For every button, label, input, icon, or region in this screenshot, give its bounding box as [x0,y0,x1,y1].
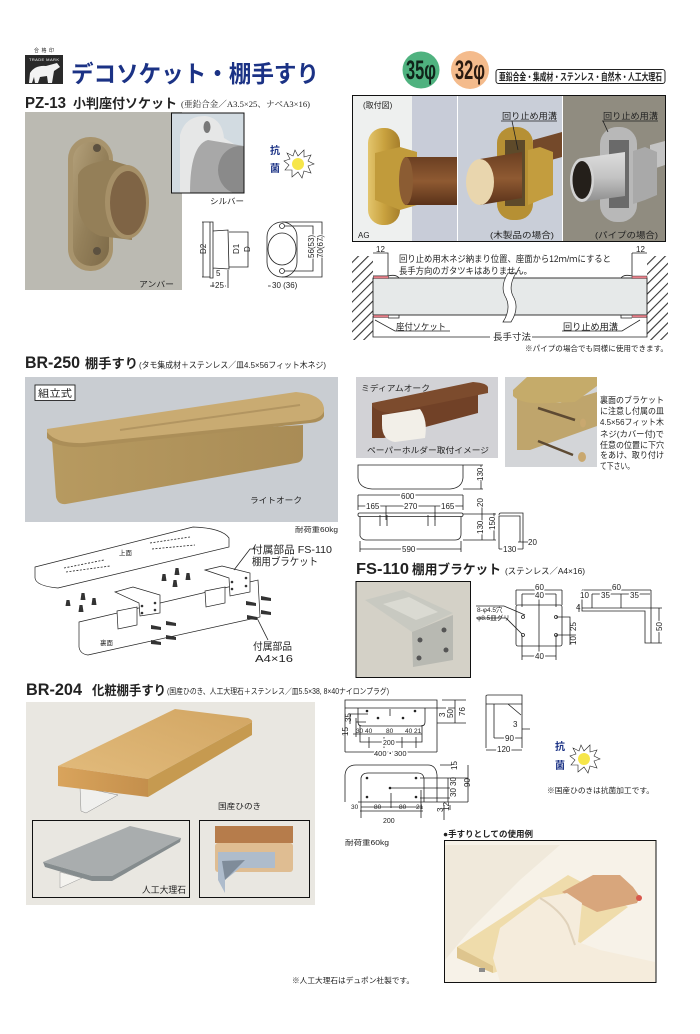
diagram: BR-250 front dimension: 130 [476,520,485,534]
diagram: PZ-13 front view: 56(53) [307,235,316,258]
photo: handrail usage [444,840,656,982]
diagram: BR-250 front dimension: 600 [401,492,415,501]
callout: FS-110 bracket parts [252,543,332,568]
diagram: BR-250 front dimension: 590 [402,545,416,554]
heading: FS-110 [356,561,585,578]
callout: FS-110 bracket parts: 棚用ブラケット [252,555,318,568]
heading: BR-250: BR-250 [25,354,80,372]
diagram: mounting cross section: ※パイプの場合でも同様に使用できます。 [525,343,668,353]
diagram: BR-204 front dimension [341,700,467,758]
diagram: BR-204 underside dimension: 80 [374,804,382,811]
back board: 裏面 [100,638,114,647]
badge: 32 phi: 32φ [455,55,485,85]
diagram: BR-204 front dimension: 35 [344,713,353,722]
diagram: FS-110 front dimension: 40 [535,652,544,661]
diagram: FS-110 front dimension [476,583,578,661]
photo: BR-250 shelf: ライトオーク [250,496,302,505]
diagram: PZ-13 side view [199,222,252,290]
diagram: BR-204 front dimension: 30 40 [356,728,373,735]
diagram: BR-204 side dimension: 90 [505,734,514,743]
photo: BR-250 shelf: 組立式 [38,387,72,400]
diagram: mounting cross section: 長手方向のガタツキはありません。 [399,265,532,276]
diagram: BR-250 side dimension: 130 [503,545,517,554]
text: bracket note: ネジ(カバー付)で [600,429,664,439]
photo: PZ-13 silver socket: シルバー [210,197,244,206]
photo: medium oak paper holder: ミディアムオーク [361,383,430,393]
diagram: BR-204 underside dimension: 21 [416,804,424,811]
top board [35,527,229,588]
panel: wood mounted AG: AG [358,231,370,240]
panel: wood case: 回り止め用溝 [502,111,558,121]
callout: A4x16 screws [253,640,294,665]
diagram: BR-250 exploded assembly [35,527,271,655]
diagram: PZ-13 side view: D [243,246,252,252]
heading: FS-110: (ステンレス／A4×16) [505,566,585,576]
diagram: PZ-13 front view: 30 (36) [272,281,298,290]
photo: medium oak paper holder: ペーパーホルダー取付イメージ [367,445,489,455]
heading: BR-204: (国産ひのき、人工大理石＋ステンレス／皿5.5×38, 8×40ナイロンプラグ) [167,686,389,696]
text: antibacterial note: ※国産ひのきは抗菌加工です。 [547,785,654,795]
diagram: mounting cross section: 座付ソケット [396,322,446,332]
diagram: BR-204 front dimension: 400・300 [374,749,407,758]
material label [496,70,665,84]
text: bracket note: て下さい。 [600,461,634,471]
diagram: BR-204 front dimension: 80 [386,728,394,735]
badge: 35 phi [402,52,440,88]
diagram: BR-204 front dimension: 15 [341,727,350,736]
diagram: BR-250 front dimension: 270 [404,502,418,511]
panel: wood case [458,96,562,241]
diagram: BR-204 underside dimension: 90 [463,778,472,787]
diagram: mounting cross section [352,245,668,353]
diagram: FS-110 side dimension: 35 [601,591,610,600]
heading: BR-250: 棚手すり [85,356,138,371]
diagram: BR-204 front dimension: 200 [383,740,395,747]
icon: trade mark bear logo [25,47,63,84]
text: marble footnote: ※人工大理石はデュポン社製です。 [292,975,414,985]
diagram: BR-250 front dimension: 165 [441,502,455,511]
text: BR-250 load: 耐荷重60kg [295,525,338,534]
diagram: FS-110 front dimension: 40 [535,591,544,600]
diagram: BR-250 front dimension [358,492,497,554]
heading: usage example: ●手すりとしての使用例 [443,829,533,839]
brackets [115,566,250,629]
diagram: BR-250 front dimension: 20 [476,498,485,507]
photo: PZ-13 silver socket [171,112,244,204]
diagram: mounting cross section: 回り止め用木ネジ納まり位置、座面から12ｍ/ｍにすると [399,253,611,264]
icon: antibacterial mark 2: 菌 [555,760,565,772]
diagram: BR-204 underside dimension: 3 [436,807,445,812]
diagram: FS-110 front dimension: 10 [569,636,578,645]
diagram: PZ-13 front view: 70(67) [316,235,325,258]
photo panel: BR-204 [26,702,315,905]
diagram: BR-204 underside dimension: 30 [351,804,359,811]
back board [79,580,260,655]
diagram: BR-250 top dimension: 130 [476,467,485,481]
diagram: PZ-13 side view: 25 [215,281,224,290]
diagram: FS-110 side dimension: 10 [580,591,589,600]
heading: BR-250 [25,354,326,372]
diagram: FS-110 front dimension: 60 [535,583,544,592]
diagram: BR-204 side dimension [486,695,530,754]
diagram: FS-110 side dimension: 60 [612,583,621,592]
diagram: BR-204 side dimension: 3 [513,720,518,729]
inset: artificial marble: 人工大理石 [142,884,186,895]
photo: hinoki shelf: 国産ひのき [218,801,261,811]
inset: artificial marble [32,820,190,898]
panel: wood mounted AG: (取付図) [363,100,393,110]
icon: trade mark bear logo: 合 格 印 [34,47,54,54]
diagram: BR-204 underside dimension: 12 [442,802,451,811]
heading: PZ-13: 小判座付ソケット [73,96,177,111]
heading: BR-250: (タモ集成材＋ステンレス／皿4.5×56フィット木ネジ) [139,360,326,370]
callout: A4x16 screws: 付属部品 [253,640,292,653]
photo: PZ-13 amber socket [25,112,182,290]
panel: wood mounted AG [353,96,457,241]
callout: FS-110 bracket parts: 付属部品 FS-110 [252,543,332,556]
text: BR-204 load: 耐荷重60kg [345,838,389,847]
icon: antibacterial mark 1 [270,144,314,178]
diagram: FS-110 front dimension: 8-φ4.5穴 [477,606,503,614]
heading: PZ-13 [25,95,310,112]
icon: antibacterial mark 1: 抗 [270,144,280,157]
diagram: BR-250 side dimension [499,513,537,554]
badge: 32 phi [451,51,489,89]
photo: BR-250 shelf [25,377,338,522]
icon: antibacterial mark 2 [555,740,600,773]
screws [66,568,271,645]
photo: PZ-13 amber socket: アンバー [139,280,174,289]
heading: FS-110: FS-110 [356,561,409,578]
panel: wood case: (木製品の場合) [490,230,554,240]
diagram: BR-204 side dimension: 120 [497,745,511,754]
photo: medium oak paper holder [356,377,498,458]
diagram: PZ-13 side view: 5 [216,269,221,278]
diagram: BR-204 underside dimension: 200 [383,818,395,825]
heading: FS-110: 棚用ブラケット [412,562,501,577]
diagram: BR-204 underside dimension: 80 [399,804,407,811]
heading: PZ-13: (亜鉛合金／A3.5×25、ナベA3×16) [181,99,310,109]
diagram: BR-204 underside dimension: 30 [449,788,458,797]
diagram: BR-204 front dimension: 76 [458,707,467,716]
heading: BR-204: BR-204 [26,681,83,699]
heading: BR-204: 化粧棚手すり [92,683,166,698]
diagram: FS-110 side dimension: 4 [576,603,581,612]
top board: 上面 [119,548,132,557]
text: bracket note: 4.5×56フィット木 [600,417,664,427]
icon: antibacterial mark 2: 抗 [555,740,565,753]
callout: A4x16 screws: A4×16 [255,654,294,665]
diagram: FS-110 front dimension: 25 [569,622,578,631]
diagram: PZ-13 front view [267,222,325,290]
badge: 35 phi: 35φ [406,55,436,85]
diagram: PZ-13 side view: D1 [232,243,241,254]
heading: PZ-13: PZ-13 [25,95,66,112]
diagram: BR-204 underside dimension [345,761,472,825]
text: bracket note: 任意の位置に下穴 [600,440,664,450]
diagram: mounting cross section: 回り止め用溝 [563,321,618,332]
diagram: PZ-13 side view: D2 [199,243,208,254]
photo panel: mounting views [352,96,666,242]
photo: hinoki shelf [58,709,261,813]
diagram: BR-250 side dimension: 20 [528,538,537,547]
text: bracket note: に注意し付属の皿 [600,406,664,416]
icon: antibacterial mark 1: 菌 [270,163,280,175]
photo: bracket rear view [505,377,597,467]
diagram: mounting cross section: 12 [636,245,645,254]
panel: pipe case: 回り止め用溝 [603,111,659,121]
title: デコソケット・棚手すり [71,60,319,87]
photo: FS-110 bracket [356,582,470,678]
diagram: FS-110 side dimension: 35 [630,591,639,600]
diagram: FS-110 side dimension: 50 [655,622,664,631]
diagram: FS-110 side dimension [576,583,664,643]
diagram: FS-110 front dimension: φ8.5皿グリ [477,613,510,622]
diagram: mounting cross section: 長手寸法 [493,331,531,342]
diagram: BR-250 front dimension: 165 [366,502,380,511]
diagram: BR-250 top dimension [358,465,485,489]
heading: BR-204 [26,681,389,699]
diagram: BR-204 underside dimension: 15 [450,761,459,770]
panel: pipe case: (パイプの場合) [595,230,658,240]
diagram: BR-204 front dimension: 50 [446,709,455,718]
diagram: BR-204 underside dimension: 30 [449,777,458,786]
diagram: BR-204 front dimension: 3 [438,712,447,717]
inset: hinoki underside [200,820,310,898]
text: bracket note: をあけ、取り付け [600,450,664,460]
icon: trade mark bear logo: TRADE MARK [29,57,59,62]
text: bracket note: 裏面のブラケット [600,395,664,405]
diagram: BR-250 front dimension: 150 [488,516,497,530]
text: bracket note [600,395,664,471]
diagram: mounting cross section: 12 [376,245,385,254]
diagram: BR-204 front dimension: 40 21 [405,728,422,735]
panel: pipe case [563,96,665,241]
